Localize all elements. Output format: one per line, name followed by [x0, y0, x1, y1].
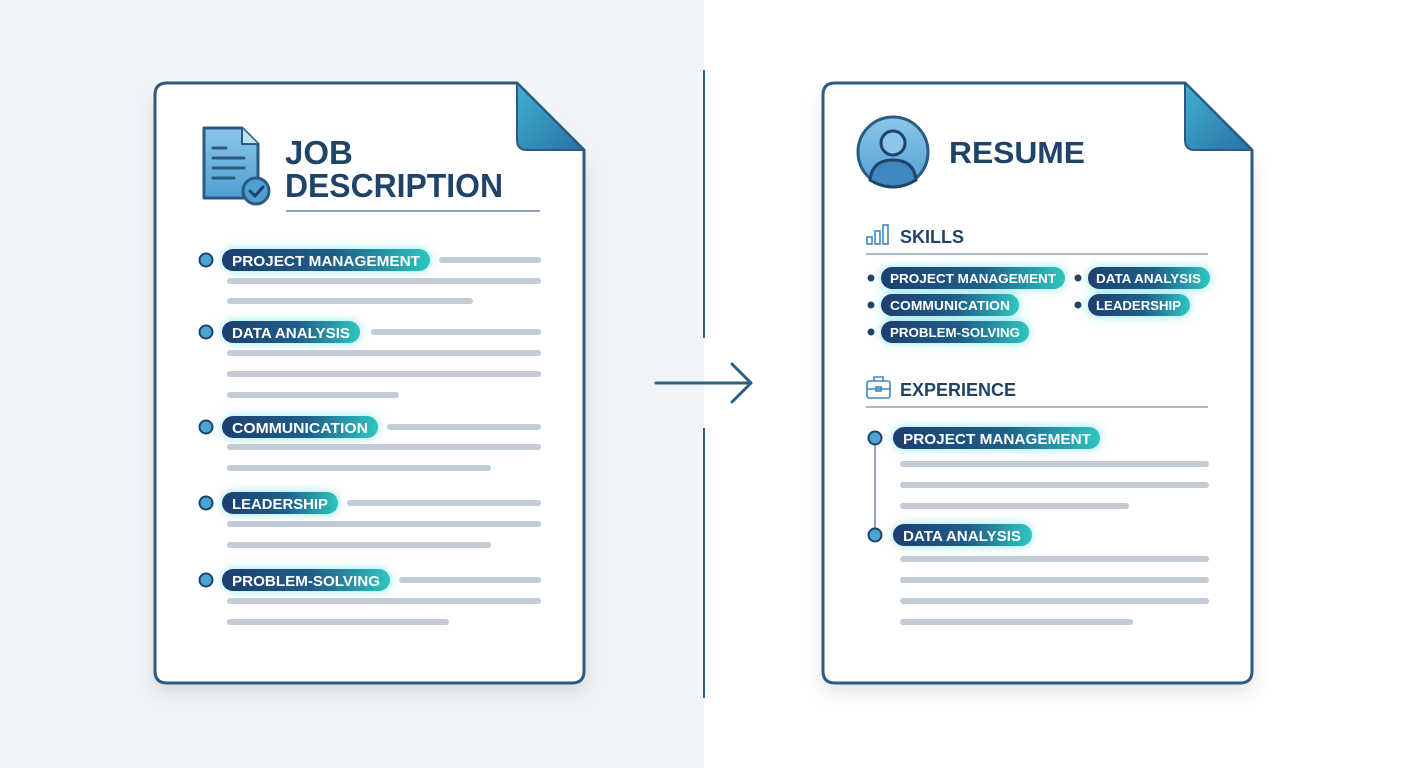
skills pills	[868, 267, 1210, 343]
item: leadership: LEADERSHIP	[232, 496, 328, 513]
fold corner	[1185, 83, 1252, 150]
panel: resume	[823, 83, 1253, 691]
section: skills heading	[867, 225, 964, 247]
item: project management	[200, 249, 538, 301]
item: data analysis: DATA ANALYSIS	[232, 325, 350, 342]
heading: job description	[285, 134, 503, 204]
icon: avatar	[858, 117, 928, 187]
section: skills heading: SKILLS	[900, 227, 964, 247]
heading: job description: DESCRIPTION	[285, 167, 503, 204]
item: communication	[200, 416, 538, 468]
section: experience heading: EXPERIENCE	[900, 380, 1016, 400]
experience timeline: PROJECT MANAGEMENT	[903, 431, 1091, 448]
skills pills: PROJECT MANAGEMENT	[890, 271, 1056, 286]
background left	[0, 0, 704, 768]
experience timeline: DATA ANALYSIS	[903, 528, 1021, 545]
section: experience heading	[867, 377, 1016, 400]
skills pills: LEADERSHIP	[1096, 298, 1181, 313]
item: leadership	[200, 492, 538, 545]
heading: resume: RESUME	[949, 135, 1085, 170]
item: problem-solving	[200, 569, 538, 622]
heading: job description: JOB	[285, 134, 353, 171]
item: problem-solving: PROBLEM-SOLVING	[232, 573, 380, 590]
icon: document with check	[204, 128, 269, 204]
panel: job description	[155, 83, 585, 691]
divider	[703, 70, 705, 698]
item: project management: PROJECT MANAGEMENT	[232, 253, 420, 270]
skills pills: DATA ANALYSIS	[1096, 271, 1201, 286]
fold corner	[517, 83, 584, 150]
skills pills: PROBLEM-SOLVING	[890, 325, 1020, 340]
skills pills: COMMUNICATION	[890, 298, 1010, 313]
arrow	[656, 364, 751, 402]
item: data analysis	[200, 321, 538, 395]
experience timeline	[868, 427, 1206, 622]
item: communication: COMMUNICATION	[232, 420, 368, 437]
